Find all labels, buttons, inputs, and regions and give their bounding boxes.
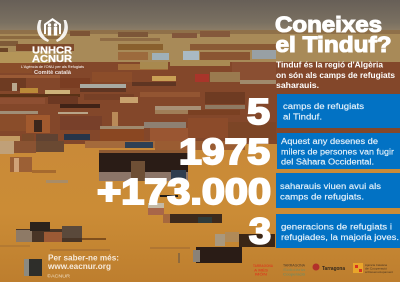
description: del Sàhara Occidental. — [281, 158, 374, 166]
panel: blue box — [277, 133, 400, 169]
partner logos — [253, 263, 393, 276]
description: al Tinduf. — [283, 112, 322, 122]
logo: Agència Catalana de Cooperació al Desenvolupament — [353, 263, 393, 274]
desert sand — [0, 144, 400, 282]
UNHCR wordmark: UNHCR — [32, 46, 73, 56]
intro text: on són als camps de refugiats — [276, 71, 396, 80]
description: camps de refugiats. — [280, 192, 364, 202]
logo: Agència Catalana de Cooperació al Desenvolupament: de Cooperació — [365, 266, 387, 270]
description: refugiades, la majoria joves. — [281, 233, 399, 242]
description — [283, 102, 364, 122]
logo: Ajuntament de Tarragona: Tarragona — [322, 266, 346, 272]
more info text: www.eacnur.org — [47, 262, 111, 271]
number 1975: 1975 — [179, 131, 270, 172]
logo: Tarragona solidària — [283, 264, 306, 276]
logo: Tarragona solidària: Solidària — [283, 268, 305, 272]
description — [281, 222, 399, 242]
logo: Tarragona solidària: TARRAGONA — [283, 264, 306, 268]
logo: red organisation — [253, 263, 273, 276]
title: el Tinduf? — [276, 32, 392, 57]
camp structures in the desert — [0, 141, 275, 276]
number +173.000: +173.000 — [97, 171, 271, 212]
icon: laurel wreath with sheltered family — [37, 18, 68, 42]
intro text: Tinduf és la regió d'Algèria — [276, 60, 384, 70]
logo tagline: L'Agència de l'ONU per als Refugiats — [21, 65, 84, 69]
panel: blue box — [276, 173, 400, 208]
town of mud-brick buildings — [0, 30, 400, 144]
logo: Agència Catalana de Cooperació al Desenvolupament: al Desenvolupament — [365, 270, 393, 274]
logo: red organisation: TARRAGONA — [253, 263, 273, 268]
more info text: Per saber-ne més: — [48, 254, 119, 262]
description: milers de persones van fugir — [281, 148, 394, 156]
description — [280, 182, 381, 202]
more info text — [47, 254, 119, 271]
number 5: 5 — [247, 91, 270, 132]
description — [281, 137, 394, 166]
committee name: Comitè català — [34, 70, 72, 76]
intro text: saharauis. — [276, 81, 319, 90]
stat row: 1975 — [179, 131, 400, 172]
logo: red organisation: MÓN — [255, 272, 267, 276]
stat row: 3 generations — [249, 210, 400, 252]
stat row: 5 camps — [247, 91, 400, 132]
logo: Agència Catalana de Cooperació al Desenvolupament: Agència Catalana — [365, 263, 387, 267]
title: Coneixes — [275, 12, 382, 37]
sky — [0, 0, 400, 32]
number 3: 3 — [249, 210, 271, 252]
photo credit: ©ACNUR — [47, 272, 71, 278]
logo: red organisation: A MÉS — [254, 268, 268, 272]
description: saharauis viuen avui als — [280, 182, 381, 191]
stat row: +173.000 — [97, 171, 400, 212]
logo: Tarragona solidària: Cooperació — [283, 272, 305, 276]
description: Aquest any desenes de — [281, 137, 379, 146]
panel: blue box — [276, 214, 400, 248]
intro text — [276, 60, 396, 90]
title — [275, 12, 392, 57]
description: generacions de refugiats i — [281, 222, 392, 232]
logo: Ajuntament de Tarragona — [312, 264, 346, 272]
panel: blue box — [277, 94, 400, 128]
description: camps de refugiats — [283, 102, 364, 111]
logo: UNHCR ACNUR Comitè català — [21, 18, 84, 76]
ACNUR wordmark: ACNUR — [32, 54, 73, 65]
